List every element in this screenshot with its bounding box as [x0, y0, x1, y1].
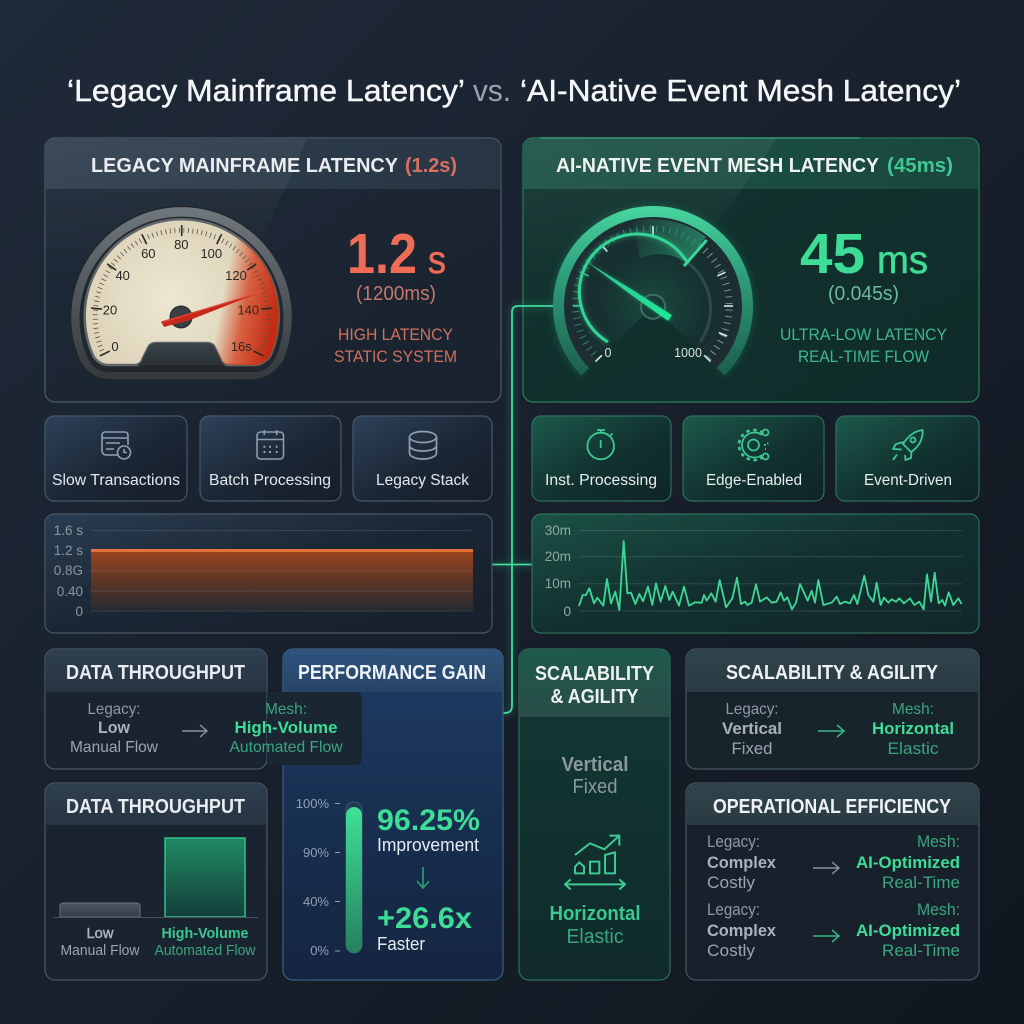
panel: operational efficiency: Real-Time — [882, 874, 960, 892]
panel: scalability comparison: Elastic — [888, 739, 939, 758]
readout: mesh value — [780, 222, 947, 366]
card: event-driven: Event-Driven — [864, 472, 952, 489]
icon: calendar — [257, 430, 284, 459]
readout: mesh value: 45 — [800, 222, 865, 286]
gauge: legacy analog dial: 100 — [200, 246, 222, 261]
readout: mesh value: ULTRA-LOW LATENCY — [780, 325, 947, 344]
icon: database — [410, 432, 436, 459]
panel: legacy mainframe latency — [45, 138, 501, 402]
chart: legacy latency flat line: 1.2 s — [54, 543, 83, 558]
readout: legacy value: 1.2 — [347, 222, 417, 286]
bar chart — [53, 838, 258, 959]
gauge: legacy analog dial: 140 — [237, 302, 259, 318]
panel: operational efficiency — [686, 783, 979, 980]
bar chart: Low — [86, 926, 114, 942]
panel: operational efficiency: Complex — [707, 854, 777, 872]
chart: legacy latency flat line — [45, 514, 492, 633]
panel: operational efficiency: Complex — [707, 922, 777, 940]
panel: scalability comparison: Fixed — [732, 739, 772, 758]
panel: scalability comparison: Horizontal — [872, 719, 954, 738]
panel: data throughput bars — [45, 783, 267, 980]
readout: mesh value: REAL-TIME FLOW — [798, 347, 929, 366]
panel: scalability comparison: Vertical — [722, 719, 782, 738]
chart: mesh latency line: 10m — [545, 576, 571, 591]
panel: scalability tall: Elastic — [566, 926, 624, 948]
gauge: mesh digital dial — [558, 211, 748, 372]
card: legacy stack — [353, 416, 492, 501]
chart: mesh latency line: 20m — [545, 549, 571, 564]
card: batch processing — [200, 416, 341, 501]
card: instant processing: Inst. Processing — [545, 472, 657, 489]
stat: improvement: Improvement — [377, 835, 479, 855]
panel: performance gain — [283, 649, 503, 980]
panel: data throughput comparison — [45, 649, 362, 769]
progress scale: 0% — [310, 943, 329, 958]
chart: legacy latency flat line: 1.6 s — [54, 523, 83, 538]
arrow: top row — [813, 862, 839, 874]
readout: mesh value: (0.045s) — [828, 283, 899, 305]
gauge: mesh digital dial: 0 — [605, 346, 612, 360]
panel: operational efficiency: Mesh: — [917, 833, 960, 851]
card: instant processing — [532, 416, 671, 501]
readout: legacy value: STATIC SYSTEM — [334, 347, 457, 366]
chart: legacy latency flat line: 0.8G — [54, 563, 83, 578]
overlay callout box — [267, 692, 362, 765]
arrow — [182, 725, 207, 737]
gauge: legacy analog dial — [71, 206, 293, 380]
panel: scalability tall: Fixed — [572, 776, 618, 798]
panel: operational efficiency: Legacy: — [707, 833, 760, 851]
bar chart: Automated Flow — [154, 943, 256, 959]
panel: data throughput bars: DATA THROUGHPUT — [66, 796, 245, 818]
title: ‘Legacy Mainframe Latency’ — [67, 73, 465, 108]
bar chart: High-Volume — [162, 926, 248, 942]
panel: scalability comparison — [686, 649, 979, 769]
heading: mesh: (45ms) — [887, 154, 953, 177]
heading: legacy: (1.2s) — [405, 154, 457, 177]
panel: scalability tall: SCALABILITY — [535, 663, 655, 685]
panel: data throughput comparison: Low — [98, 718, 131, 737]
panel: scalability comparison: Legacy: — [726, 701, 778, 718]
panel: operational efficiency: AI-Optimized — [856, 854, 960, 872]
gauge: legacy analog dial: 40 — [115, 268, 130, 283]
panel: data throughput comparison: Manual Flow — [70, 739, 158, 756]
icon: gear nodes — [739, 430, 768, 460]
panel: scalability tall — [519, 649, 670, 980]
panel: scalability tall: Horizontal — [550, 903, 640, 925]
card: slow transactions — [45, 416, 187, 501]
heading: legacy: LEGACY MAINFRAME LATENCY — [91, 154, 398, 177]
panel: data throughput comparison: High-Volume — [234, 718, 338, 737]
card: batch processing: Batch Processing — [209, 472, 331, 489]
panel: operational efficiency: Costly — [707, 874, 756, 892]
stat: improvement — [377, 804, 480, 855]
readout: legacy value: HIGH LATENCY — [338, 325, 453, 344]
chart: mesh latency line: 0 — [563, 604, 571, 619]
panel: data throughput comparison: Automated Flow — [230, 739, 343, 756]
title: vs. — [473, 73, 511, 108]
panel: scalability comparison: Mesh: — [892, 701, 934, 718]
card: edge-enabled: Edge-Enabled — [706, 472, 802, 489]
panel: operational efficiency: Legacy: — [707, 901, 760, 919]
icon: rocket — [893, 430, 923, 460]
readout: legacy value — [334, 222, 457, 366]
arrow: down — [417, 867, 429, 888]
stat: improvement: 96.25% — [377, 804, 480, 837]
stat: faster: Faster — [377, 934, 425, 954]
progress scale: 40% — [303, 894, 329, 909]
chart: mesh latency line — [532, 514, 979, 633]
gauge: legacy analog dial: 20 — [103, 302, 117, 318]
panel: data throughput comparison: Legacy: — [88, 701, 140, 718]
card: slow transactions: Slow Transactions — [52, 472, 180, 489]
progress scale — [296, 796, 362, 958]
card: edge-enabled — [683, 416, 824, 501]
gauge: legacy analog dial: 0 — [111, 339, 119, 354]
readout: legacy value: (1200ms) — [356, 283, 436, 305]
stat: faster — [377, 902, 472, 954]
title — [67, 73, 961, 108]
chart: mesh latency line: 30m — [545, 523, 571, 538]
panel: performance gain: PERFORMANCE GAIN — [298, 662, 486, 684]
panel: operational efficiency: OPERATIONAL EFFICIENCY — [713, 796, 952, 818]
gauge: legacy analog dial: 120 — [225, 268, 247, 283]
progress scale: 100% — [296, 796, 329, 811]
panel: scalability tall: Vertical — [562, 754, 628, 776]
panel: operational efficiency: Costly — [707, 942, 756, 960]
card: legacy stack: Legacy Stack — [376, 472, 469, 489]
gauge: legacy analog dial: 60 — [141, 246, 156, 261]
gauge: legacy analog dial: 16s — [231, 339, 252, 354]
panel: operational efficiency: Mesh: — [917, 901, 960, 919]
panel: scalability tall: & AGILITY — [550, 686, 639, 708]
readout: mesh value: ms — [877, 239, 928, 282]
heading: mesh: AI-NATIVE EVENT MESH LATENCY — [556, 154, 879, 177]
chart: legacy latency flat line: 0.40 — [57, 584, 83, 599]
gauge: mesh digital dial: 1000 — [674, 346, 702, 360]
panel: scalability comparison: SCALABILITY & AGILITY — [726, 662, 939, 684]
icon: horizontal scaling — [565, 836, 625, 889]
progress scale: 90% — [303, 845, 329, 860]
title: ‘AI-Native Event Mesh Latency’ — [520, 73, 961, 108]
arrow: bottom row — [813, 930, 839, 942]
arrow — [818, 725, 844, 737]
icon: stopwatch — [587, 430, 614, 459]
panel: data throughput comparison: Mesh: — [265, 701, 307, 718]
icon: transaction clock — [102, 432, 130, 459]
readout: legacy value: s — [428, 239, 446, 282]
stat: faster: +26.6x — [377, 902, 472, 935]
panel: ai-native event mesh latency — [523, 138, 979, 402]
connector lines — [474, 306, 553, 718]
panel: operational efficiency: AI-Optimized — [856, 922, 960, 940]
panel: operational efficiency: Real-Time — [882, 942, 960, 960]
chart: legacy latency flat line: 0 — [75, 604, 83, 619]
bar chart: Manual Flow — [60, 943, 140, 959]
panel: data throughput comparison: DATA THROUGHPUT — [66, 662, 245, 684]
card: event-driven — [836, 416, 979, 501]
gauge: legacy analog dial: 80 — [174, 237, 189, 252]
